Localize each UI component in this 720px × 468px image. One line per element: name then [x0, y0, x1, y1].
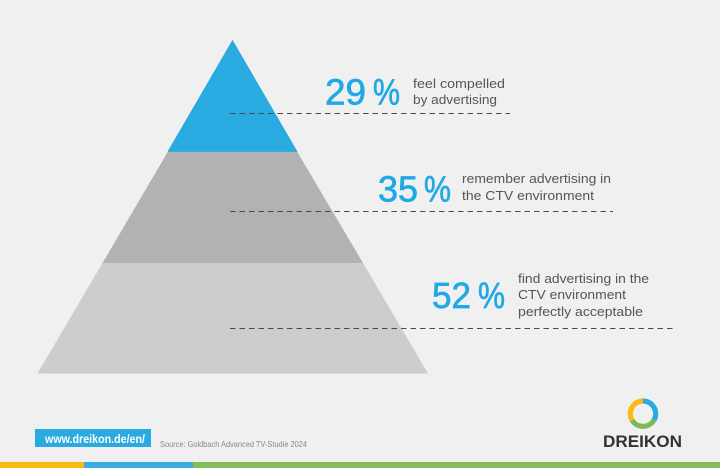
- percentage 29: %: [373, 72, 400, 112]
- percentage 35: %: [424, 168, 451, 210]
- stat: 52 %: [432, 272, 649, 319]
- stat: 35 %: [378, 168, 611, 210]
- logo wordmark: DREIKON: [603, 432, 682, 451]
- url badge: [35, 429, 151, 447]
- logo ring: [630, 401, 656, 426]
- stat: 29 %: [325, 72, 505, 112]
- percentage 35: [378, 168, 451, 210]
- percentage 52: 52: [432, 275, 471, 316]
- url badge: www.dreikon.de/en/: [44, 432, 146, 446]
- leader line: 29 %: [230, 112, 510, 114]
- pyramid tier: top blue: [168, 40, 297, 152]
- description 35: the CTV environment: [462, 189, 595, 203]
- description 52: perfectly acceptable: [518, 305, 643, 319]
- description 29: feel compelled: [413, 77, 505, 91]
- bottom colour bar: [0, 462, 720, 468]
- logo: DREIKON: [603, 401, 682, 451]
- leader line: 52 %: [230, 328, 674, 330]
- percentage 29: [325, 72, 400, 112]
- leader line: 35 %: [230, 210, 613, 212]
- source note: Source: Goldbach Advanced TV-Studie 2024: [160, 439, 307, 449]
- pyramid tier: middle grey: [102, 152, 363, 263]
- description 29: by advertising: [413, 93, 497, 107]
- description 52: find advertising in the: [518, 272, 649, 286]
- pyramid: [38, 40, 428, 374]
- description 35: remember advertising in: [462, 172, 611, 186]
- percentage 52: %: [478, 275, 505, 316]
- percentage 52: [432, 275, 505, 316]
- percentage 29: 29: [325, 72, 366, 112]
- description 52: CTV environment: [518, 288, 627, 302]
- percentage 35: 35: [378, 168, 418, 210]
- pyramid tier: bottom grey: [38, 263, 428, 374]
